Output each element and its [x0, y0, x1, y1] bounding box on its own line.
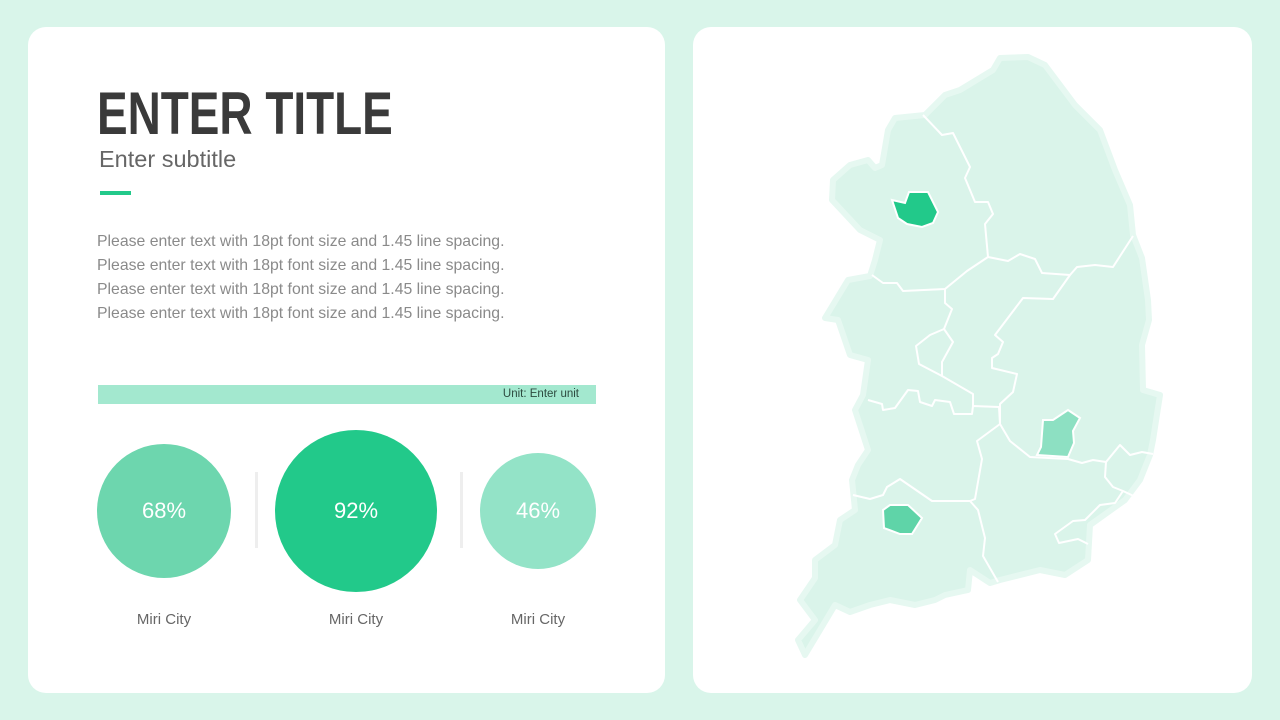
accent line — [100, 191, 131, 195]
title: ENTER TITLE — [97, 80, 393, 147]
text block: Please enter text with 18pt font size and 1.45 line spacing. — [97, 305, 504, 322]
panel: left — [28, 27, 665, 693]
highlight: Daegu — [1037, 410, 1080, 457]
circle: 46%: 46% — [516, 498, 560, 523]
panel: map — [693, 27, 1252, 693]
unit bar — [98, 385, 596, 404]
circle: 68% — [97, 444, 231, 578]
text block: Please enter text with 18pt font size and 1.45 line spacing. — [97, 257, 504, 274]
circle: 68%: 68% — [142, 498, 186, 523]
highlight: Seoul — [892, 192, 938, 227]
text block: Please enter text with 18pt font size and 1.45 line spacing. — [97, 233, 504, 250]
label 3: Miri City — [511, 611, 565, 628]
text block — [97, 233, 504, 322]
unit bar: Unit: Enter unit — [503, 388, 579, 400]
circle: 92%: 92% — [334, 498, 378, 523]
label 2: Miri City — [329, 611, 383, 628]
circle: 46% — [480, 453, 596, 569]
label 1: Miri City — [137, 611, 191, 628]
highlight: Gwangju — [883, 505, 922, 534]
circle: 92% — [275, 430, 437, 592]
subtitle: Enter subtitle — [99, 146, 236, 172]
text block: Please enter text with 18pt font size and 1.45 line spacing. — [97, 281, 504, 298]
